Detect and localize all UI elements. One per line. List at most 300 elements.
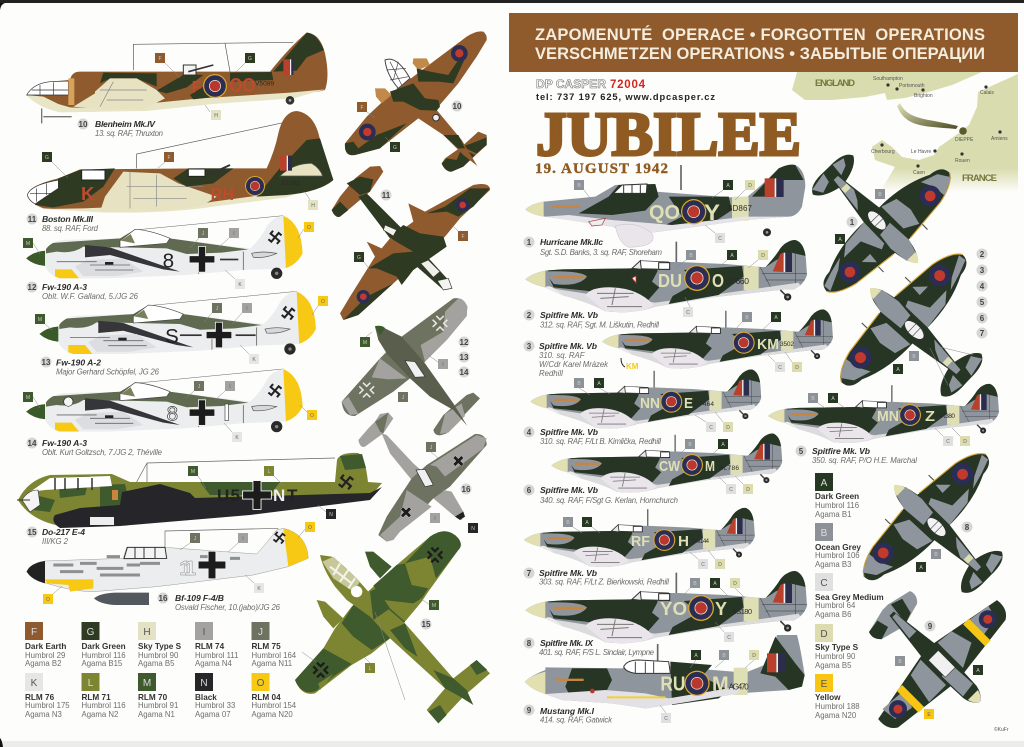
colour callout chips: B: [693, 581, 697, 587]
captions: right sheet: 414. sq. RAF, Gatwick: [540, 716, 613, 724]
captions: right sheet: 4: [980, 282, 985, 291]
captions: right sheet: 3: [980, 266, 985, 275]
colour callout chips: H: [214, 113, 218, 119]
paint legend: left sheet: Humbrol 29: [25, 651, 65, 660]
code letters: Hurricane: [649, 200, 753, 225]
paint legend: left sheet: Humbrol 164: [252, 651, 297, 660]
colour callout chips: K: [235, 435, 239, 441]
map: English Channel: DIEPPE: [955, 137, 974, 143]
map: English Channel: Portsmouth: [899, 83, 925, 89]
colour callout chips: B: [566, 520, 570, 526]
map: English Channel: Brighton: [914, 93, 933, 99]
profile 5: Spitfire Mk.Vb: Z: [925, 408, 935, 425]
captions: right sheet: Spitfire Mk. Vb: [540, 427, 598, 437]
profile 15: Do-217 E-4: T: [287, 486, 298, 505]
paint legend: left sheet: Humbrol 90: [138, 651, 179, 660]
colour callout chips: I: [229, 384, 231, 390]
paint legend: right sheet: Humbrol 90: [815, 652, 856, 661]
map: English Channel: Caen: [913, 170, 925, 176]
captions: right sheet: Spitfire Mk. Vb: [539, 341, 597, 351]
colour callout chips: G: [248, 56, 252, 62]
captions: right sheet: 5: [980, 298, 985, 307]
colour callout chips: J: [198, 384, 201, 390]
paint legend: left sheet: H: [143, 627, 151, 638]
top view 9: Mustang: [826, 548, 1024, 747]
captions: left sheet: 14: [460, 368, 469, 377]
profile 3: Spitfire Mk.Vb: KM: [626, 362, 639, 371]
captions: left sheet: Oblt. W.F. Galland, 5./JG 26: [42, 292, 139, 301]
colour callout chips: F: [167, 155, 171, 161]
captions: right sheet: Hurricane Mk.IIc: [540, 237, 603, 247]
banner: forgotten operations: ZAPOMENUTÉ OPERACE • FORGOTTEN OPERATIONS: [535, 25, 985, 44]
colour callout chips: H: [311, 203, 315, 209]
profile 9: Mustang Mk.I: M: [712, 673, 729, 696]
colour callout chips: A: [838, 237, 842, 243]
profile 16: Bf-109 F-4/B: 11: [179, 557, 196, 580]
paint legend: right sheet: [815, 473, 884, 720]
profile 8: Spitfire Mk.IX: [522, 568, 812, 649]
colour callout chips: A: [726, 183, 730, 189]
code letters: Hurricane: BD867: [727, 204, 753, 213]
subtitle: date: 19. AUGUST 1942: [535, 161, 668, 177]
paint legend: left sheet: L: [88, 678, 94, 689]
paint legend: right sheet: Humbrol 188: [815, 702, 860, 711]
captions: right sheet: Spitfire Mk. Vb: [812, 446, 870, 456]
top view 10: Blenheim: [345, 31, 487, 172]
colour callout chips: L: [369, 666, 372, 672]
captions: left sheet: 10: [79, 120, 88, 129]
colour callout chips: C: [701, 562, 705, 568]
paint legend: right sheet: Sea Grey Medium: [815, 593, 884, 602]
top view 11: Boston: [332, 166, 490, 320]
colour callout chips: M: [26, 395, 30, 401]
captions: left sheet: 13. sq. RAF, Thruxton: [95, 129, 163, 138]
colour callout chips: A: [896, 367, 900, 373]
paint legend: right sheet: Humbrol 64: [815, 601, 856, 610]
colour callout chips: B: [811, 396, 815, 402]
captions: right sheet: 310. sq. RAF: [539, 351, 586, 360]
brand line: tel: 737 197 625, www.dpcasper.cz: [536, 92, 715, 102]
paint legend: right sheet: Humbrol 106: [815, 551, 860, 560]
profile 5: Spitfire Mk.Vb: AR380: [937, 413, 955, 420]
captions: right sheet: Redhill: [539, 369, 563, 378]
paint legend: left sheet: J: [258, 627, 263, 638]
paint legend: left sheet: Humbrol 154: [252, 701, 297, 710]
profile 1: Hurricane Mk.IIc: [525, 165, 805, 247]
paint legend: left sheet: Agama B5: [138, 659, 175, 668]
copyright note: ©KuFr: [994, 726, 1009, 733]
profile 7: Spitfire Mk.Vb: BM144: [692, 539, 710, 545]
colour callout chips: F: [360, 105, 364, 111]
map: English Channel: Amiens: [991, 136, 1008, 142]
map: English Channel: FRANCE: [962, 173, 997, 184]
colour callout chips: A: [713, 581, 717, 587]
colour callout chips: C: [778, 365, 782, 371]
profile 14: Fw-190 A-3: [23, 367, 307, 433]
paint legend: left sheet: Humbrol 91: [138, 701, 178, 710]
colour callout chips: B: [688, 442, 692, 448]
colour callout chips: A: [919, 565, 923, 571]
captions: right sheet: [524, 216, 988, 724]
colour callout chips: B: [878, 192, 882, 198]
captions: left sheet: 12: [460, 338, 469, 347]
code letters: Hurricane: Y: [704, 200, 720, 225]
colour callout chips: D: [761, 253, 765, 259]
colour callout chips: C: [718, 236, 722, 242]
paint legend: left sheet: G: [87, 627, 95, 638]
captions: right sheet: Spitfire Mk. Vb: [540, 485, 598, 495]
paint legend: left sheet: Black: [195, 693, 217, 702]
colour callout chips: J: [430, 445, 433, 451]
captions: right sheet: 5: [799, 447, 804, 456]
colour callout chips: M: [191, 469, 195, 475]
profile 12: Fw-190 A-3: 8: [163, 249, 174, 272]
map: English Channel: Southampton: [873, 76, 903, 82]
colour callout chips: K: [252, 357, 256, 363]
profile 2: Spitfire Mk.Vb: [522, 237, 812, 318]
captions: left sheet: Fw-190 A-3: [42, 282, 87, 292]
paint legend: left sheet: Humbrol 175: [25, 701, 70, 710]
colour callout chips: C: [727, 635, 731, 641]
profile 15: Do-217 E-4: U5: [217, 486, 240, 505]
profile 7: Spitfire Mk.Vb: [521, 505, 759, 572]
profile 16: Bf-109 F-4/B: [27, 528, 308, 605]
captions: left sheet: 13: [460, 353, 469, 362]
profile 6: Spitfire Mk.Vb: CW: [659, 458, 681, 475]
paint legend: left sheet: Sky Type S: [138, 642, 182, 651]
captions: left sheet: 16: [462, 485, 471, 494]
colour callout chips: D: [748, 183, 752, 189]
paint legend: left sheet: O: [257, 678, 265, 689]
colour callout chips: C: [946, 439, 950, 445]
profile 6: Spitfire Mk.Vb: M: [705, 458, 715, 475]
colour callout chips: N: [471, 526, 475, 532]
paint legend: left sheet: RLM 76: [25, 693, 55, 702]
captions: right sheet: 312. sq. RAF, Sgt. M. Liškutin, Redhill: [540, 320, 659, 330]
paint legend: right sheet: D: [820, 629, 828, 640]
map: English Channel: [792, 72, 1018, 192]
paint legend: left sheet: Agama N4: [195, 659, 233, 668]
title: JUBILEE: JUBILEE: [536, 101, 801, 169]
captions: right sheet: W/Cdr Karel Mrázek: [539, 360, 609, 369]
captions: right sheet: 2: [527, 311, 532, 320]
profile 8: Spitfire Mk.IX: YO: [660, 599, 687, 619]
paint legend: right sheet: Agama B3: [815, 560, 851, 569]
captions: left sheet: Major Gerhard Schöpfel, JG 26: [56, 368, 160, 376]
captions: right sheet: Sgt. S.D. Banks, 3. sq. RAF, Shoreham: [540, 248, 662, 257]
captions: left sheet: Fw-190 A-2: [56, 358, 101, 368]
colour callout chips: J: [202, 231, 205, 237]
captions: left sheet: 16: [159, 594, 168, 603]
paint legend: right sheet: Dark Green: [815, 492, 859, 501]
captions: right sheet: 9: [527, 706, 532, 715]
profile 10: Blenheim Mk.IV: OO: [229, 74, 255, 97]
captions: left sheet: Do-217 E-4: [42, 527, 85, 537]
colour callout chips: A: [597, 381, 601, 387]
top view 12-14: Fw-190: [342, 298, 480, 435]
profile 2: Spitfire Mk.Vb: O: [712, 271, 724, 291]
captions: right sheet: 3: [527, 342, 532, 351]
paint legend: left sheet: Agama B2: [25, 659, 61, 668]
captions: right sheet: 2: [980, 250, 985, 259]
colour callout chips: A: [585, 520, 589, 526]
colour callout chips: F: [461, 234, 465, 240]
colour callout chips: E: [927, 712, 931, 718]
profile 10: Blenheim Mk.IV: F: [192, 78, 202, 97]
captions: left sheet: 10: [453, 102, 462, 111]
profile 2: Spitfire Mk.Vb: DU: [658, 271, 682, 291]
top view 15: Do-217: [295, 531, 490, 723]
colour callout chips: C: [686, 310, 690, 316]
colour callout chips: L: [268, 469, 271, 475]
colour callout chips: D: [733, 581, 737, 587]
paint legend: left sheet: Humbrol 111: [195, 651, 238, 660]
captions: right sheet: Spitfire Mk. Vb: [539, 568, 597, 578]
banner: forgotten operations: [509, 13, 1018, 72]
colour callout chips: J: [194, 536, 197, 542]
colour callout chips: I: [246, 306, 248, 312]
colour callout chips: I: [242, 536, 244, 542]
captions: left sheet: 14: [28, 439, 37, 448]
paint legend: left sheet: RLM 74: [195, 642, 225, 651]
captions: right sheet: 1: [850, 218, 855, 227]
paint legend: left sheet: F: [31, 627, 37, 638]
captions: right sheet: 7: [527, 569, 532, 578]
paint legend: right sheet: E: [821, 679, 828, 690]
captions: right sheet: 8: [527, 639, 532, 648]
profile 6: Spitfire Mk.Vb: BL786: [719, 465, 739, 472]
colour callout chips: B: [577, 183, 581, 189]
colour callout chips: B: [577, 381, 581, 387]
colour callout chips: J: [402, 395, 405, 401]
colour callout chips: A: [721, 442, 725, 448]
colour callout chips: M: [38, 317, 42, 323]
profile 10: Blenheim Mk.IV: V5089: [255, 80, 275, 87]
paint legend: left sheet: Dark Green: [82, 642, 126, 651]
profile 13: Fw-190 A-2: [37, 289, 320, 356]
paint legend: left sheet: RLM 04: [252, 693, 281, 702]
captions: right sheet: 401. sq. RAF, F/S L. Sinclair, Lympne: [539, 648, 655, 657]
captions: left sheet: Bf-109 F-4/B: [175, 593, 224, 603]
paint legend: right sheet: Agama B6: [815, 610, 851, 619]
colour callout chips: C: [729, 487, 733, 493]
colour callout chips: O: [321, 299, 325, 305]
colour callout chips: A: [976, 668, 980, 674]
profile 11: Boston Mk.III: K: [81, 183, 95, 204]
colour callout chips: N: [329, 512, 333, 518]
captions: left sheet: Boston Mk.III: [42, 214, 94, 224]
colour callout chips: C: [709, 425, 713, 431]
profile 4: Spitfire Mk.Vb: [528, 367, 765, 434]
brand line: DP CASPER: [536, 77, 606, 91]
paint legend: left sheet: RLM 71: [82, 693, 111, 702]
captions: left sheet: 11: [28, 215, 37, 224]
brand line: [536, 77, 715, 102]
colour callout chips: I: [442, 362, 444, 368]
paint legend: left sheet: Humbrol 116: [82, 701, 126, 710]
colour callout chips: F: [158, 56, 162, 62]
colour callout chips: M: [363, 340, 367, 346]
profile 8: Spitfire Mk.IX: BS180: [732, 607, 752, 616]
profile 9: Mustang Mk.I: AG470: [729, 682, 749, 691]
paint legend: left sheet: Agama N20: [252, 710, 293, 719]
captions: right sheet: 1: [527, 238, 532, 247]
captions: left sheet: III/KG 2: [42, 537, 69, 546]
colour callout chips: G: [45, 155, 49, 161]
colour callout chips: B: [934, 552, 938, 558]
paint legend: right sheet: B: [821, 528, 828, 539]
profile 8: Spitfire Mk.IX: Y: [715, 599, 727, 619]
colour callout chips: O: [308, 525, 312, 531]
profile 4: Spitfire Mk.Vb: E: [684, 395, 693, 412]
profile 15: Do-217 E-4: [17, 453, 382, 528]
colour callout chips: D: [795, 365, 799, 371]
map: English Channel: Rouen: [955, 158, 970, 164]
colour callout chips: B: [689, 253, 693, 259]
colour callout chips: D: [963, 439, 967, 445]
colour callout chips: B: [912, 354, 916, 360]
paint legend: left sheet: K: [31, 678, 38, 689]
colour callout chips: A: [774, 315, 778, 321]
paint legend: left sheet: RLM 75: [252, 642, 281, 651]
colour callout chips: G: [357, 255, 361, 261]
colour callout chips: M: [432, 603, 436, 609]
captions: right sheet: 350. sq. RAF, P/O H.E. Marchal: [812, 456, 917, 465]
captions: right sheet: 310. sq. RAF, F/Lt B. Kimlička, Redhill: [540, 437, 661, 446]
captions: right sheet: Spitfire Mk. Vb: [540, 310, 598, 320]
profile 6: Spitfire Mk.Vb: [549, 431, 786, 498]
colour callout chips: K: [238, 282, 242, 288]
top view 2-7: Spitfire: [809, 224, 1024, 445]
colour callout chips: A: [694, 653, 698, 659]
profile 9: Mustang Mk.I: RU: [660, 673, 685, 696]
paint legend: right sheet: Ocean Grey: [815, 543, 861, 552]
captions: left sheet: Oblt. Kurt Goltzsch, 7./JG 2, Théville: [42, 448, 163, 457]
captions: right sheet: Spitfire Mk. IX: [540, 638, 594, 648]
profile 2: Spitfire Mk.Vb: EP660: [725, 276, 749, 286]
map: English Channel: Cherbourg: [871, 149, 895, 155]
paint legend: left sheet: Agama B15: [82, 659, 123, 668]
captions: right sheet: 7: [980, 329, 985, 338]
paint legend: right sheet: Yellow: [815, 693, 841, 702]
paint legend: left sheet: N: [200, 678, 208, 689]
captions: left sheet: 12: [28, 283, 37, 292]
colour callout chips: D: [718, 562, 722, 568]
paint legend: left sheet: Dark Earth: [25, 642, 66, 651]
colour callout chips: B: [745, 315, 749, 321]
profile 10: Blenheim Mk.IV: [27, 33, 327, 123]
code letters: Hurricane: QO: [649, 202, 680, 224]
paint legend: left sheet: RLM 70: [138, 693, 168, 702]
profile 7: Spitfire Mk.Vb: RF: [631, 533, 650, 550]
paint legend: right sheet: Agama N20: [815, 711, 857, 720]
captions: left sheet: [26, 100, 472, 630]
brand line: 72004: [610, 79, 646, 91]
map: English Channel: ENGLAND: [815, 78, 855, 89]
banner: forgotten operations: VERSCHMETZEN OPERATIONS • ЗАБЫТЫЕ ОПЕРАЦИИ: [535, 45, 985, 63]
colour callout chips: C: [664, 716, 668, 722]
captions: right sheet: 6: [980, 314, 985, 323]
profile 11: Boston Mk.III: Z2293: [282, 180, 300, 187]
colour callout chips: A: [831, 396, 835, 402]
captions: left sheet: Blenheim Mk.IV: [95, 119, 156, 129]
colour callout chips: K: [257, 586, 261, 592]
paint legend: left sheet: Agama N1: [138, 710, 175, 719]
colour callout chips: O: [307, 225, 311, 231]
paint legend: left sheet: M: [143, 678, 151, 689]
profile 12: Fw-190 A-3: [23, 213, 307, 280]
captions: left sheet: Fw-190 A-3: [42, 438, 87, 448]
paint legend: right sheet: A: [821, 478, 828, 489]
colour callout chips: J: [216, 306, 219, 312]
colour callout chips: B: [898, 659, 902, 665]
paint legend: left sheet: Humbrol 116: [82, 651, 126, 660]
profile 4: Spitfire Mk.Vb: EP464: [694, 401, 714, 408]
captions: right sheet: 9: [928, 622, 933, 631]
top view 16: Bf-109: [358, 413, 487, 542]
paint legend: left sheet: Agama 07: [195, 710, 231, 719]
captions: right sheet: Mustang Mk.I: [540, 706, 595, 716]
captions: left sheet: 15: [422, 620, 431, 629]
colour callout chips: I: [233, 231, 235, 237]
profile 11: Boston Mk.III: [27, 111, 333, 213]
profile 3: Spitfire Mk.Vb: 3502: [780, 341, 794, 348]
captions: right sheet: 4: [527, 428, 532, 437]
paint legend: right sheet: C: [820, 578, 828, 589]
profile 5: Spitfire Mk.Vb: MN: [877, 408, 899, 425]
colour callout chips: D: [752, 653, 756, 659]
paint legend: left sheet: Humbrol 33: [195, 701, 235, 710]
profile 11: Boston Mk.III: RH: [211, 185, 234, 204]
colour callout chips: O: [310, 413, 314, 419]
profile 13: Fw-190 A-2: S: [165, 325, 179, 348]
captions: left sheet: 11: [382, 191, 391, 200]
colour callout chips: D: [746, 487, 750, 493]
profile 3: Spitfire Mk.Vb: KM: [757, 336, 779, 353]
paint legend: right sheet: Agama B5: [815, 661, 852, 670]
colour callout chips: I: [434, 516, 436, 522]
paint legend: right sheet: Sky Type S: [815, 643, 859, 652]
top view 1: Hurricane: [766, 109, 979, 322]
captions: right sheet: 340. sq. RAF, F/Sgt G. Kerlan, Hornchurch: [540, 496, 678, 505]
colour callout chips: G: [393, 145, 397, 151]
paint legend: right sheet: Humbrol 116: [815, 501, 859, 510]
colour callout chips: O: [46, 597, 50, 603]
profile 5: Spitfire Mk.Vb: [765, 381, 1003, 448]
captions: right sheet: 6: [527, 486, 532, 495]
colour callout chips: A: [730, 253, 734, 259]
paint legend: right sheet: Agama B1: [815, 510, 851, 519]
colour callout chips: B: [722, 653, 726, 659]
paint legend: left sheet: [25, 622, 297, 719]
map: English Channel: Calais: [980, 90, 994, 96]
colour callout chips: D: [726, 425, 730, 431]
profile 4: Spitfire Mk.Vb: NN: [640, 395, 660, 412]
arrow: England to Dieppe: [897, 103, 958, 129]
captions: left sheet: 13: [42, 358, 51, 367]
captions: right sheet: 303. sq. RAF, F/Lt Z. Bieńkowski, Redhill: [539, 578, 669, 586]
captions: left sheet: Osvald Fischer, 10.(jabo)/JG 26: [175, 603, 281, 612]
captions: left sheet: 15: [28, 528, 37, 537]
colour callout chips: M: [26, 241, 30, 247]
captions: left sheet: 88. sq. RAF, Ford: [42, 224, 99, 233]
profile 9: Mustang Mk.I: [525, 635, 805, 708]
top view 8: Spitfire: [833, 424, 1024, 639]
paint legend: left sheet: I: [203, 627, 205, 638]
captions: right sheet: 8: [965, 523, 970, 532]
map: English Channel: Le Havre: [911, 149, 932, 155]
paint legend: left sheet: Agama N11: [252, 659, 292, 668]
